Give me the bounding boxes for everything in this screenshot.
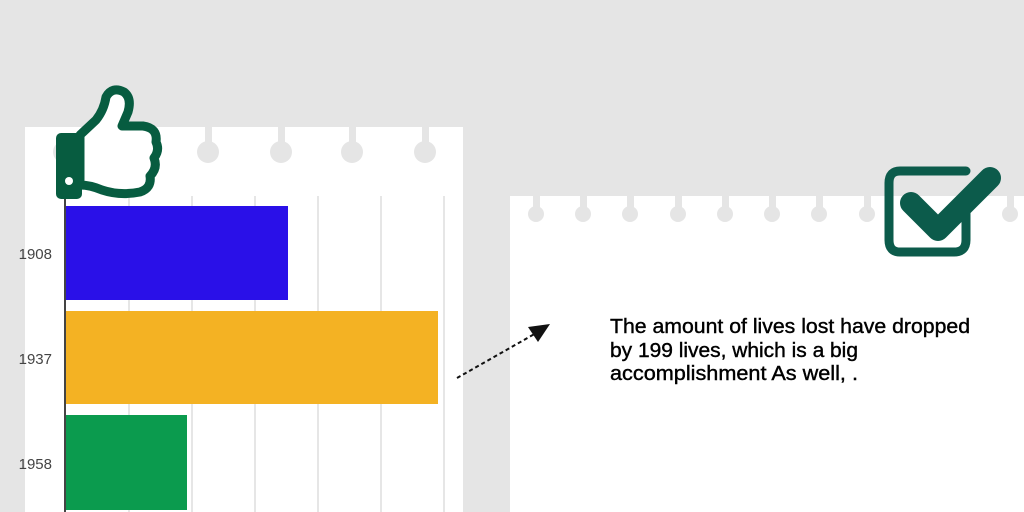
bar chart: 1908 [19, 246, 52, 263]
text block: accomplishment As well, . [610, 363, 858, 385]
text block: by 199 lives, which is a big [610, 340, 858, 362]
text block: The amount of lives lost have dropped [610, 316, 970, 338]
icon: thumbs up [56, 90, 158, 199]
text block [610, 316, 970, 385]
bar chart: 1958 [19, 456, 52, 473]
arrow [457, 324, 550, 378]
panel: chart notepad [25, 127, 463, 512]
bar chart: 1937 [19, 351, 52, 368]
icon: checkbox [889, 171, 990, 252]
panel: text notepad [510, 196, 1024, 512]
bar chart [19, 196, 444, 512]
